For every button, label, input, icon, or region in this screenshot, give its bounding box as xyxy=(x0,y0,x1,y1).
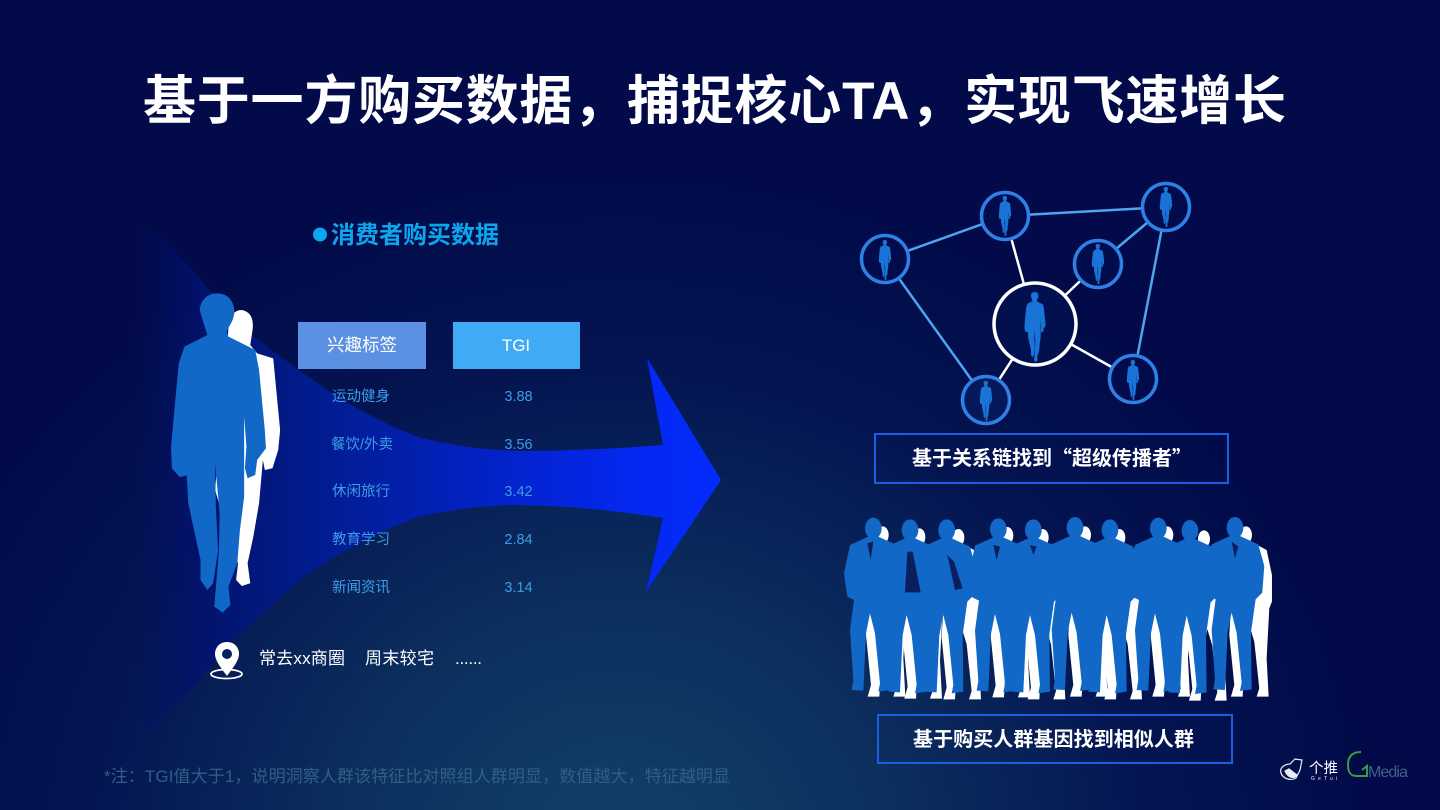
table header: TGI: TGI xyxy=(502,336,530,355)
table row xyxy=(332,483,533,500)
callout: lookalike audience xyxy=(878,715,1232,763)
footnote: *注：TGI值大于1，说明洞察人群该特征比对照组人群明显，数值越大，特征越明显 xyxy=(104,767,730,786)
crowd silhouettes xyxy=(844,517,1272,701)
arrow: funnel from persona to right xyxy=(130,218,721,755)
icon: blue person silhouette xyxy=(171,293,266,613)
table row: 3.14 xyxy=(504,580,533,596)
behaviour tags xyxy=(259,649,482,668)
table xyxy=(298,322,580,596)
table header: TGI xyxy=(453,322,580,369)
title: 基于一方购买数据，捕捉核心TA，实现飞速增长 xyxy=(143,72,1286,131)
network nodes xyxy=(862,184,1190,424)
callout: super spreaders xyxy=(875,434,1228,483)
table row: 教育学习 xyxy=(332,531,390,548)
table row xyxy=(331,436,533,453)
table row xyxy=(332,579,533,596)
network diagram xyxy=(862,184,1190,424)
network links xyxy=(885,207,1166,400)
table header: interest tags xyxy=(298,322,426,369)
logo: GeTui and GMedia xyxy=(1281,752,1408,782)
table row: 3.56 xyxy=(504,437,533,453)
table row: 3.88 xyxy=(504,389,533,405)
table row xyxy=(332,388,533,405)
table row: 休闲旅行 xyxy=(332,483,390,500)
table row: 3.42 xyxy=(504,484,533,500)
logo wordmark: 个推 xyxy=(1309,760,1338,777)
icon: location pin xyxy=(211,642,242,678)
table row xyxy=(332,531,533,548)
table row: 运动健身 xyxy=(332,388,390,405)
table row: 新闻资讯 xyxy=(332,579,390,596)
logo icon xyxy=(1281,759,1302,779)
logo: GeTui and GMedia: GeTui xyxy=(1311,776,1337,782)
behaviour tags: 周末较宅 xyxy=(365,649,434,668)
table header: interest tags: 兴趣标签 xyxy=(327,335,397,355)
white back layer xyxy=(859,526,1272,701)
logo Media: Media xyxy=(1368,764,1408,781)
blue front layer xyxy=(844,517,1264,694)
icon: white person silhouette xyxy=(215,310,280,586)
ties and shirts xyxy=(867,542,1238,592)
behaviour tags: ...... xyxy=(455,649,482,668)
table row: 餐饮/外卖 xyxy=(331,436,393,453)
logo G xyxy=(1348,752,1367,776)
callout: lookalike audience: 基于购买人群基因找到相似人群 xyxy=(913,728,1194,751)
callout: super spreaders: 基于关系链找到“超级传播者” xyxy=(912,442,1192,471)
table row: 2.84 xyxy=(504,532,533,548)
network people xyxy=(879,187,1172,421)
behaviour tags: 常去xx商圈 xyxy=(259,649,345,668)
heading: consumer purchase data: 消费者购买数据 xyxy=(331,222,499,249)
